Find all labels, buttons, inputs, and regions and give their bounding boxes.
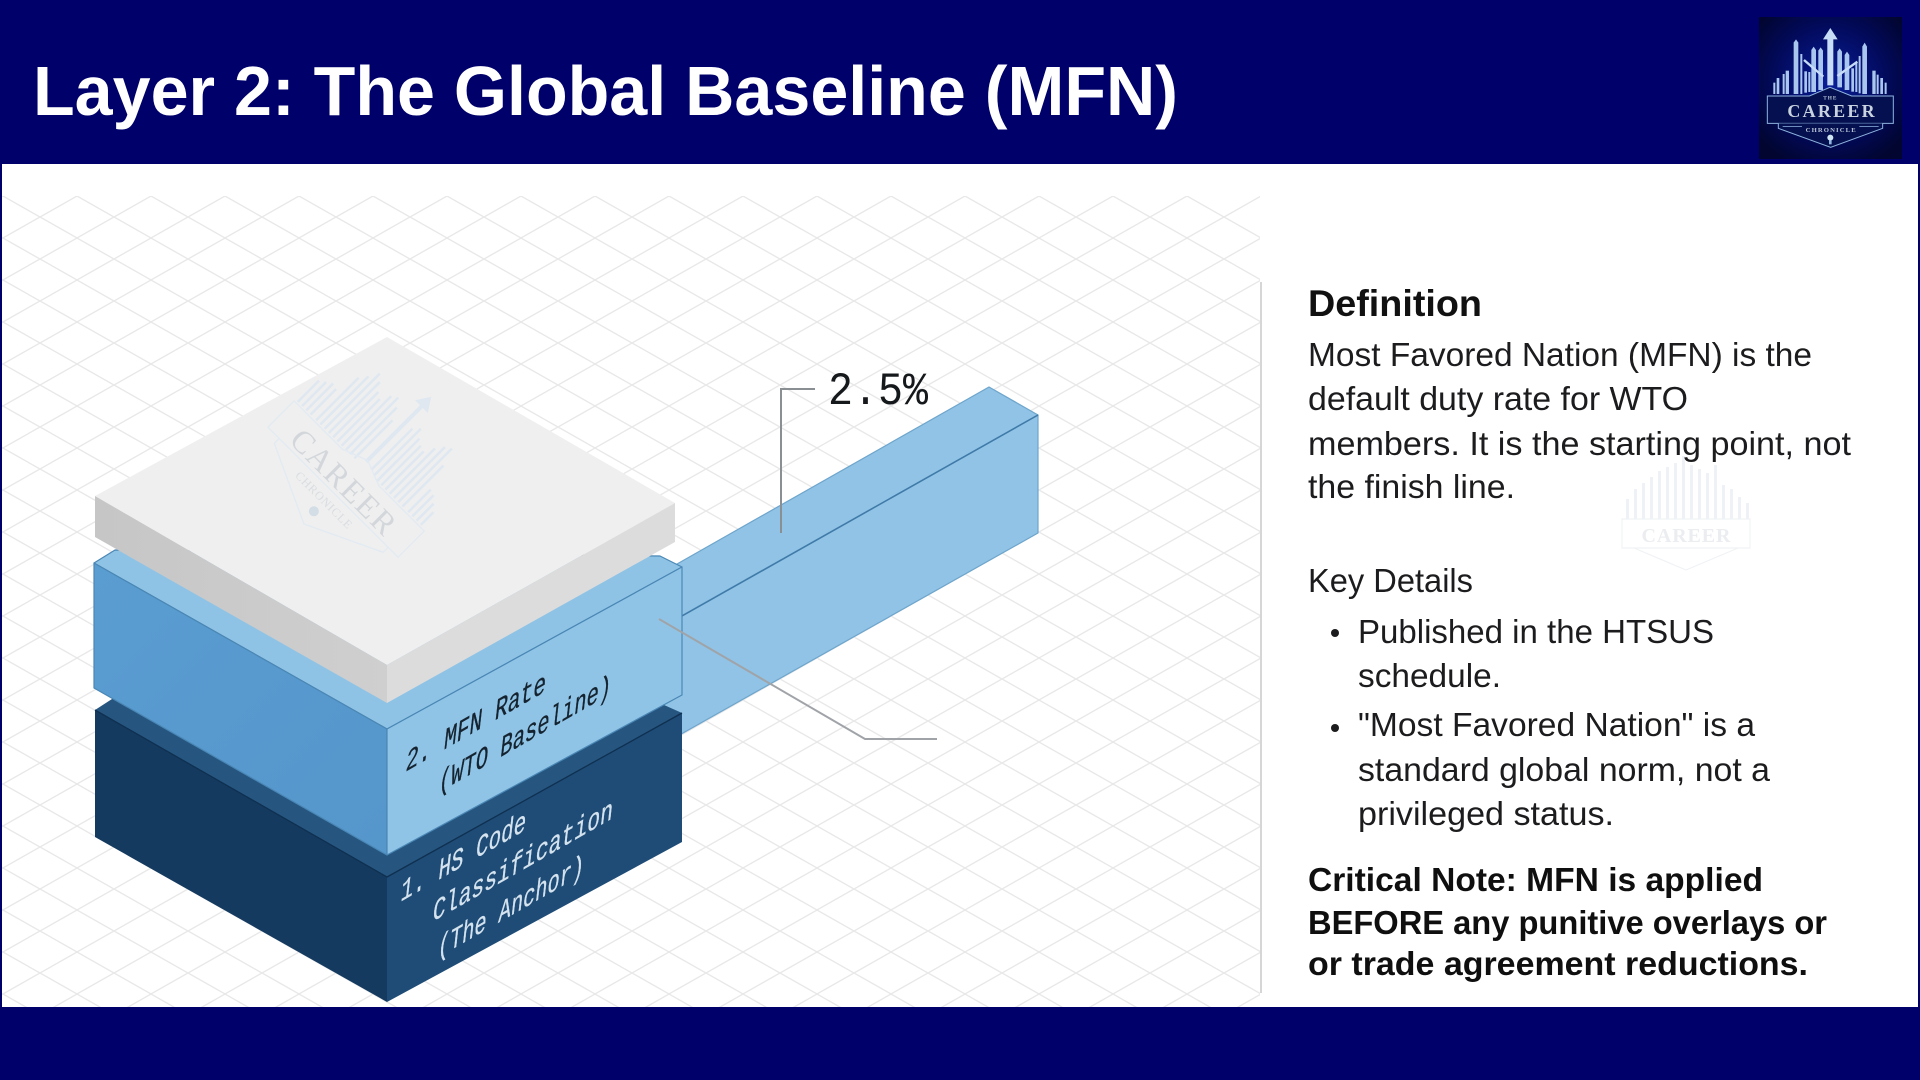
definition heading: Definition [1308,283,1482,324]
label: HS code classification: Classification [431,792,615,932]
label: HS code classification [399,792,615,968]
layer 2: MFN rate blue block [94,550,682,855]
bullet two: "Most Favored Nation" is a [1358,706,1756,743]
callout: 2.5 percent: 2.5% [828,366,928,418]
definition paragraph: Most Favored Nation (MFN) is the [1308,336,1812,373]
bullet one [1331,613,1714,694]
layer 3: white top slab [95,337,675,703]
critical note [1308,861,1827,982]
footer band [0,1007,1920,1080]
label: HS code classification: 1. HS Code [399,804,528,912]
bullet two: standard global norm, not a [1358,751,1771,788]
watermark on top slab [238,330,495,588]
bullet two: privileged status. [1358,795,1614,832]
critical note: or trade agreement reductions. [1308,945,1808,982]
watermark on top slab: CHRONICLE [292,469,355,531]
title: Layer 2: The Global Baseline (MFN) [33,52,1178,130]
definition text block [1308,283,1851,505]
logo: The Career Chronicle: CHRONICLE [1806,127,1856,134]
header band [0,0,1920,165]
logo: The Career Chronicle [1759,17,1902,159]
critical note: BEFORE any punitive overlays or [1308,904,1827,941]
label: MFN rate: (WTO Baseline) [437,668,613,803]
layer 1: HS code dark block [95,699,682,1002]
definition paragraph: the finish line. [1308,468,1515,505]
key details heading: Key Details [1308,562,1473,599]
definition paragraph: members. It is the starting point, not [1308,425,1851,462]
long blue tariff bar [660,387,1038,746]
definition paragraph: default duty rate for WTO [1308,380,1688,417]
main white panel [2,164,1918,1008]
logo: The Career Chronicle: THE [1823,95,1837,101]
right watermark: CAREER [1642,525,1731,547]
label: MFN rate: 2. MFN Rate [404,665,548,782]
bullet one: Published in the HTSUS [1358,613,1714,650]
label: HS code classification: (The Anchor) [436,848,586,968]
divider [1260,282,1262,993]
key details block [1308,562,1771,832]
bullet two [1331,706,1771,832]
bullet one: schedule. [1358,657,1501,694]
isometric stack diagram [94,330,1038,1002]
right watermark [1622,456,1750,570]
definition paragraph [1308,336,1851,505]
callout: 2.5 percent [781,366,928,533]
callout leader line [659,619,937,739]
critical note: Critical Note: MFN is applied [1308,861,1763,898]
logo: The Career Chronicle: CAREER [1787,101,1876,121]
watermark on top slab: CAREER [283,421,405,543]
